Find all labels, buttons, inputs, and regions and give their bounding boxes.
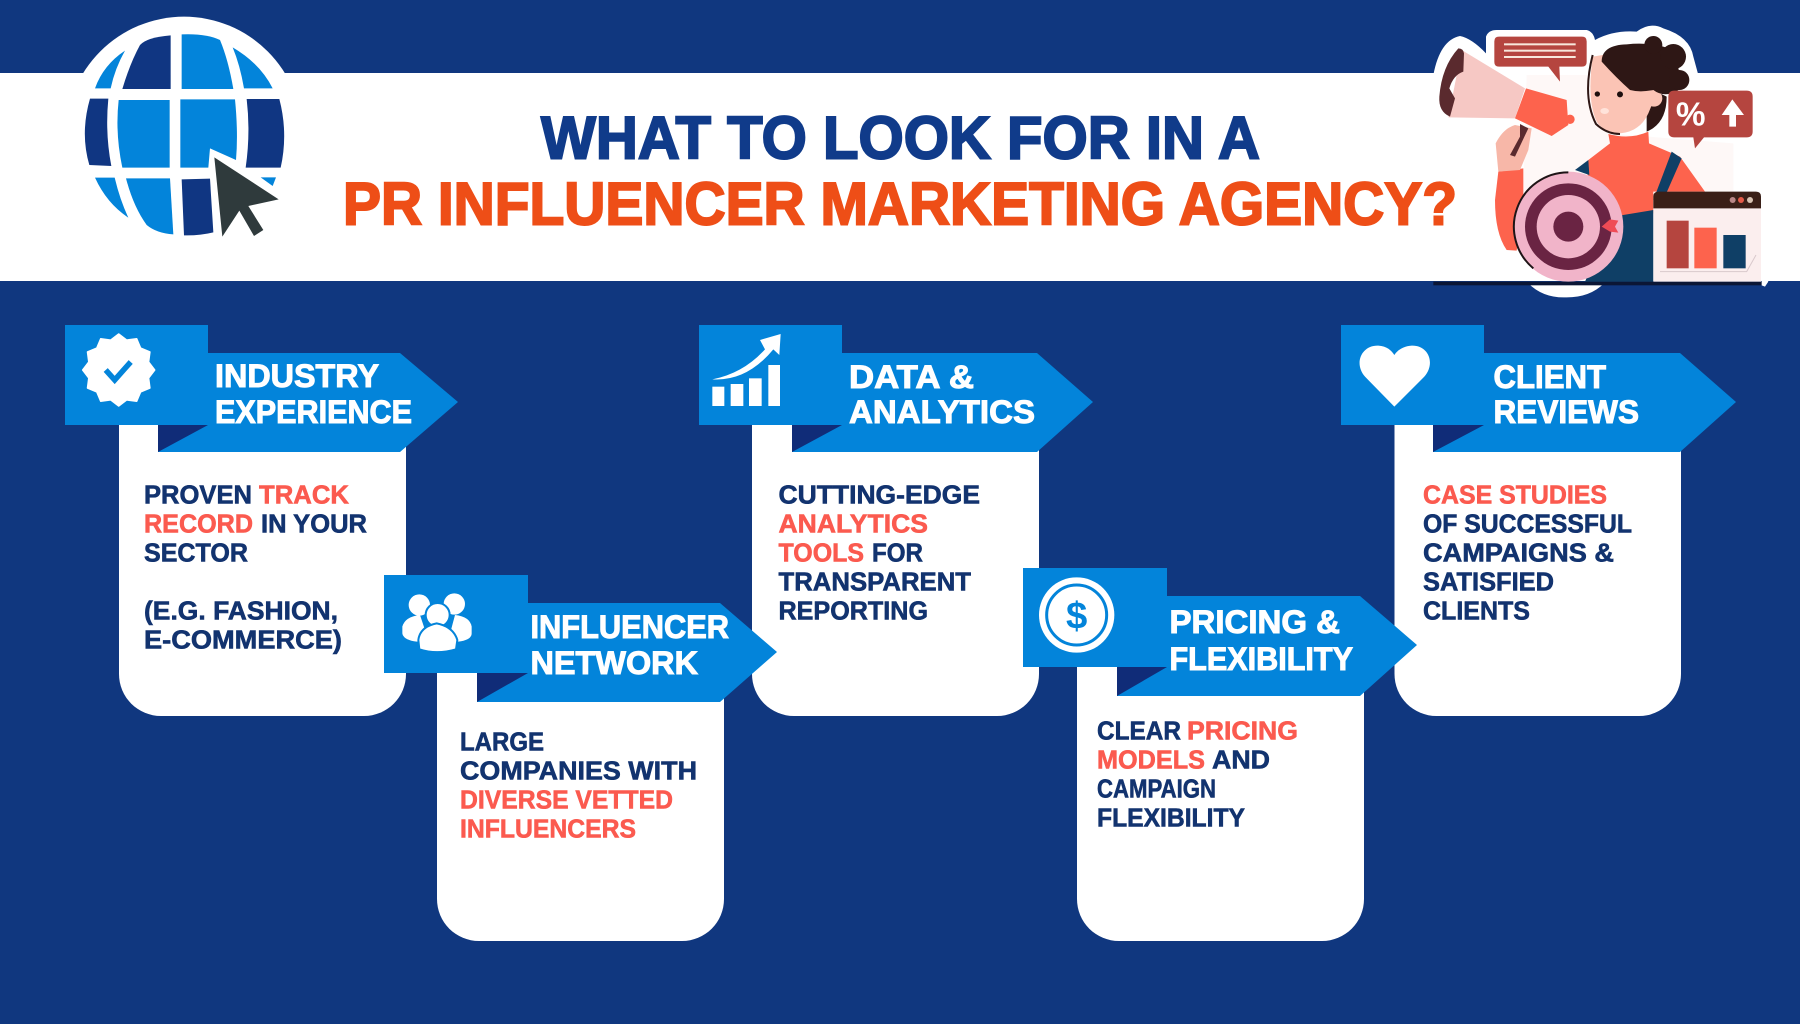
- text block: industry experience: TRACK: [259, 482, 350, 510]
- text block: pricing and flexibility: [1097, 718, 1298, 832]
- icon: globe with cursor: [66, 17, 302, 253]
- text block: industry experience: (E.G. FASHION,: [144, 598, 338, 626]
- text block: client reviews: SATISFIED: [1423, 568, 1554, 596]
- heading: data and analytics: DATA &: [849, 359, 974, 395]
- heading: pricing and flexibility: [1170, 604, 1353, 677]
- heading: data and analytics: [849, 359, 1035, 430]
- icon: dollar coin: [1039, 577, 1114, 653]
- text block: industry experience: SECTOR: [144, 540, 248, 568]
- text block: data and analytics: ANALYTICS: [778, 510, 928, 538]
- heading: pricing and flexibility: FLEXIBILITY: [1170, 641, 1353, 677]
- heading: client reviews: REVIEWS: [1494, 394, 1639, 430]
- text block: industry experience: [144, 482, 367, 654]
- panel: influencer network: [384, 575, 777, 941]
- icon: dollar coin: $: [1066, 595, 1087, 638]
- heading: client reviews: CLIENT: [1494, 359, 1606, 395]
- heading: client reviews: [1494, 359, 1639, 430]
- text block: data and analytics: TRANSPARENT: [778, 568, 971, 596]
- text block: client reviews: CASE STUDIES: [1423, 482, 1607, 510]
- text block: client reviews: CLIENTS: [1423, 598, 1530, 626]
- icon: growth chart: [712, 334, 781, 406]
- text block: pricing and flexibility: AND: [1212, 746, 1270, 774]
- heading: pricing and flexibility: PRICING &: [1170, 604, 1340, 640]
- text block: data and analytics: CUTTING-EDGE: [778, 482, 980, 510]
- panel: data and analytics: [699, 325, 1093, 716]
- text block: pricing and flexibility: MODELS: [1097, 746, 1205, 774]
- panel: pricing and flexibility: [1023, 568, 1417, 941]
- text block: pricing and flexibility: CLEAR: [1097, 718, 1181, 746]
- title: [343, 104, 1457, 238]
- heading: industry experience: [215, 358, 412, 430]
- text block: data and analytics: [778, 482, 980, 626]
- text block: influencer network: LARGE: [460, 728, 544, 756]
- text block: pricing and flexibility: FLEXIBILITY: [1097, 804, 1245, 832]
- text block: pricing and flexibility: PRICING: [1187, 718, 1298, 746]
- illustration: woman with megaphone, target and chart: [1433, 26, 1768, 297]
- text block: client reviews: [1423, 482, 1632, 626]
- text block: influencer network: INFLUENCERS: [460, 816, 636, 844]
- text block: industry experience: RECORD: [144, 510, 253, 538]
- text block: pricing and flexibility: CAMPAIGN: [1097, 776, 1216, 804]
- text block: industry experience: E-COMMERCE): [144, 626, 342, 654]
- heading: data and analytics: ANALYTICS: [849, 394, 1035, 430]
- heading: influencer network: NETWORK: [530, 645, 698, 681]
- text block: influencer network: [460, 728, 697, 844]
- text block: client reviews: OF SUCCESSFUL: [1423, 510, 1632, 538]
- text block: industry experience: IN YOUR: [261, 510, 367, 538]
- text block: data and analytics: FOR: [872, 540, 923, 568]
- header band: [0, 73, 1800, 281]
- text block: influencer network: COMPANIES WITH: [460, 758, 697, 786]
- illustration: woman with megaphone, target and chart: %: [1676, 96, 1705, 133]
- text block: client reviews: CAMPAIGNS &: [1423, 540, 1614, 568]
- panel: client reviews: [1341, 325, 1736, 716]
- text block: data and analytics: REPORTING: [778, 598, 928, 626]
- title: WHAT TO LOOK FOR IN A: [541, 104, 1260, 172]
- icon: heart: [1360, 346, 1430, 407]
- icon: verified badge: [83, 334, 155, 406]
- heading: influencer network: [530, 609, 729, 681]
- title: PR INFLUENCER MARKETING AGENCY?: [343, 170, 1457, 238]
- text block: industry experience: PROVEN: [144, 482, 252, 510]
- panel: industry experience: [65, 325, 458, 716]
- heading: influencer network: INFLUENCER: [530, 609, 729, 645]
- text block: data and analytics: TOOLS: [778, 540, 864, 568]
- text block: influencer network: DIVERSE VETTED: [460, 786, 673, 814]
- heading: industry experience: EXPERIENCE: [215, 394, 412, 430]
- icon: people group: [402, 593, 472, 652]
- heading: industry experience: INDUSTRY: [215, 358, 379, 394]
